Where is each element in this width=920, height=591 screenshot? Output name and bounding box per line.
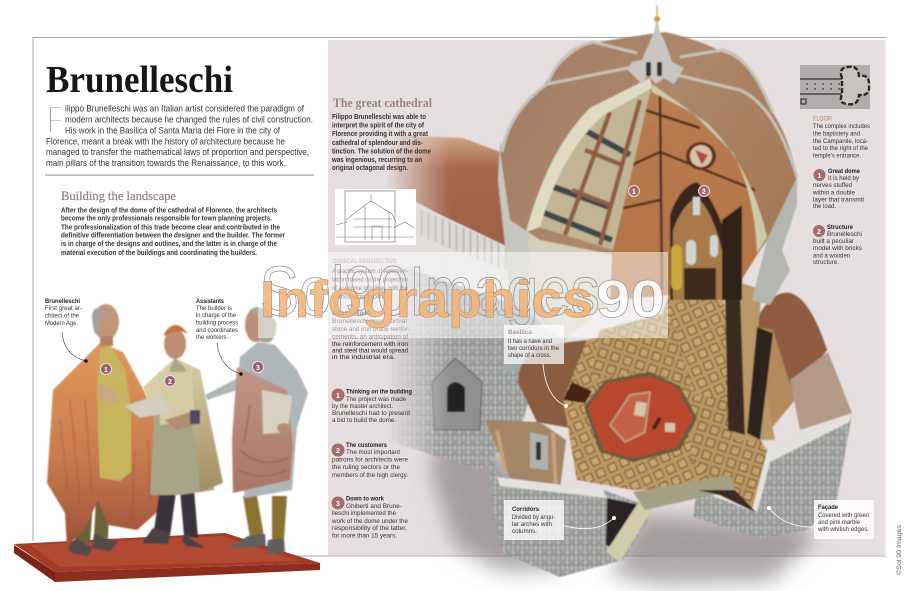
text: conical perspective and materials: tation based on the projection — [332, 276, 408, 284]
text: floor: the Campanile, loca- — [813, 138, 868, 145]
intro text block: His work in the Basilica of Santa Maria dei Fiore in the city of — [65, 125, 280, 136]
label: assistants: Assistants — [196, 298, 224, 305]
callout: corridors: Corridors — [512, 506, 539, 513]
section: building the landscape: After the design of the dome of the cathedral of Florence, the architects — [61, 205, 277, 214]
item 1: thinking on the building: The project was made — [346, 396, 406, 403]
text: great dome: It is held by — [828, 175, 860, 182]
intro text block: modern architects because he changed the rules of civil construction. — [65, 115, 313, 126]
intro text block: Florence, meant a break with the history of architecture because he — [46, 136, 285, 147]
text: floor: FLOOR — [813, 116, 832, 122]
building shadow — [430, 420, 815, 585]
section: the great cathedral: Florence providing it with a great — [332, 129, 429, 138]
cream cut-edge arches — [526, 78, 652, 232]
label: assistants: in charge of the — [196, 312, 236, 319]
text: conical perspective and materials: and steel that would spread — [332, 348, 408, 354]
badge 1 on figure: 1 — [104, 367, 108, 374]
section: the great cathedral: interpret the spirit of the city of — [332, 120, 425, 130]
text: great dome: the load. — [813, 203, 836, 210]
text: floor: The complex includes — [813, 123, 871, 130]
text: structure: Structure — [827, 224, 853, 231]
callout: corridors: Divided by angu- — [512, 514, 555, 521]
text: structure: built a peculiar — [813, 238, 855, 245]
intro text block — [46, 99, 313, 169]
callout: facade: and pink marble — [818, 519, 860, 526]
illustration: platform — [14, 533, 320, 582]
item 2: the customers: The customers — [346, 442, 387, 449]
item 3: down to work: responsibility of the latter, — [332, 525, 407, 532]
callout: basilica: two corridors in the — [508, 345, 559, 352]
item 3: down to work — [331, 496, 408, 540]
watermark: 90 — [596, 270, 665, 329]
text: great dome: 1 — [818, 173, 822, 180]
text: conical perspective and materials: vanishing points. — [332, 294, 392, 300]
text: floor: temple's entrance. — [813, 152, 861, 160]
floor plan image — [800, 65, 870, 109]
text: structure — [813, 224, 863, 266]
illustration: Brunelleschi figure — [47, 304, 163, 556]
round window — [686, 142, 716, 170]
item 3: down to work: Ghiberti and Brune- — [346, 503, 402, 510]
section: the great cathedral: was ingenious, recurring to an — [331, 155, 422, 164]
text: conical perspective and materials: the reinforcement with iron — [332, 341, 408, 348]
item 2: the customers: The most important — [346, 449, 400, 456]
text: conical perspective and materials: cements, an anticipation of — [332, 334, 408, 340]
dome base drum right — [752, 177, 797, 305]
badge 3 on figure: 3 — [256, 365, 260, 372]
section: the great cathedral: original octagonal design. — [332, 163, 408, 172]
text: conical perspective and materials: of a volume into lines with the — [332, 285, 408, 292]
red octagon floor — [584, 372, 697, 462]
intro text block: ilippo Brunelleschi was an Italian artist considered the paradigm of — [65, 104, 304, 115]
text: conical perspective and materials — [332, 258, 410, 361]
item 2: the customers: members of the high clergy. — [332, 472, 408, 479]
right chapel dome — [757, 293, 827, 395]
main floor — [563, 280, 767, 510]
lantern — [628, 17, 684, 84]
left chapel semi-dome — [518, 340, 587, 428]
section: building the landscape: The professionalization of this trade become clear and contributed in the — [61, 222, 280, 231]
item 3: down to work: Down to work — [346, 496, 384, 502]
perspective sketch — [335, 189, 416, 245]
item 2: the customers: the ruling sectors or the — [332, 464, 400, 471]
text: structure: and a wooden — [813, 252, 850, 260]
label: Brunelleschi: chitect of the — [45, 312, 79, 320]
label: Brunelleschi: Brunelleschi — [45, 298, 80, 305]
label: assistants: The builder is — [196, 305, 233, 312]
callout: corridors: columns. — [512, 528, 537, 535]
intro text block: managed to transfer the mathematical laws of proportion and perspective, — [46, 147, 309, 158]
label: assistants — [196, 298, 243, 376]
section: building the landscape: is in charge of the designs and outlines, and the latter is in charge of the — [61, 239, 277, 248]
text: structure: Brunelleschi — [827, 231, 862, 238]
section: the great cathedral: The great cathedral — [333, 96, 432, 110]
item 3: down to work: lleschi implemented the — [332, 510, 396, 517]
section: the great cathedral — [331, 96, 432, 172]
text: floor: the baptistery and — [813, 130, 860, 138]
callout: facade: with whitish edges. — [817, 526, 869, 533]
text: great dome: nerves stuffed — [813, 182, 852, 189]
badge 2 on dome — [698, 186, 710, 196]
watermark: Infographics — [260, 271, 593, 329]
cathedral illustration — [385, 5, 852, 577]
text: conical perspective and materials: stone and iron brace reinfor- — [332, 326, 410, 333]
text: great dome: layer that transmit — [813, 196, 864, 204]
item 1: thinking on the building — [332, 388, 412, 424]
text: structure: model with bricks — [813, 245, 863, 252]
label: assistants: the workers. — [196, 334, 228, 341]
text: conical perspective and materials: CONICAL PERSPECTIVE — [333, 258, 397, 265]
title: Brunelleschi — [46, 59, 233, 101]
item 2: the customers — [332, 442, 408, 479]
exposed brick structure — [538, 88, 651, 250]
text: conical perspective and materials: Materials — [332, 310, 372, 317]
section: building the landscape: definitive differentiation between the designer and the builder. The former — [61, 231, 285, 240]
text: great dome: within a double — [812, 190, 855, 196]
item 2: the customers: patrons for architects were — [332, 456, 408, 464]
illustration: assistant figure — [125, 325, 223, 548]
callout: basilica — [504, 325, 568, 408]
section: building the landscape: become the only professionals responsible for town planning projects. — [61, 214, 272, 223]
callout: corridors — [504, 500, 616, 540]
text: great dome: Great dome — [828, 168, 860, 175]
item 1: thinking on the building: 1 — [336, 393, 340, 400]
credit: ©Sol 90 Images — [896, 525, 903, 575]
interior walls — [610, 88, 757, 300]
text: structure: 2 — [817, 229, 821, 236]
item 1: thinking on the building: by the master architect. — [332, 403, 393, 410]
label: Brunelleschi: First great ar- — [45, 305, 82, 312]
section: building the landscape: Building the landscape — [61, 189, 176, 203]
badge 2 on figure: 2 — [168, 379, 172, 386]
item 2: the customers: 2 — [336, 448, 340, 455]
item 1: thinking on the building: a bid to build the dome. — [332, 417, 396, 424]
section: building the landscape: material execution of the buildings and coordinating the builders. — [61, 248, 257, 257]
watermark: Sol90Images — [260, 252, 600, 330]
badge 1 on dome: 1 — [632, 189, 636, 196]
text: floor — [813, 116, 871, 160]
badge 2 on dome: 2 — [702, 189, 706, 196]
item 1: thinking on the building: Brunelleschi had to present — [332, 410, 410, 417]
callout: basilica: Basilica — [508, 329, 532, 336]
far nave arch — [670, 182, 735, 300]
label: assistants: and coordinates — [196, 327, 239, 334]
text: floor: ted to the right of the — [813, 145, 868, 152]
intro text block: main pillars of the transition towards the Renaissance, to this work. — [46, 158, 286, 169]
item 3: down to work: 3 — [336, 501, 340, 508]
callout: corridors: lar arches with — [512, 521, 552, 528]
text: structure: structure. — [813, 259, 839, 266]
section: the great cathedral: cathedral of splendour and dis- — [332, 138, 424, 147]
callout: facade — [767, 500, 874, 539]
chapels front walls — [693, 413, 852, 538]
text: conical perspective and materials: in the industrial era. — [332, 354, 395, 361]
callout: facade: Covered with green — [818, 512, 869, 519]
illustration: builder figure — [205, 307, 308, 554]
item 1: thinking on the building: Thinking on the building — [346, 388, 412, 396]
badge 3 on figure — [252, 362, 264, 372]
section: the great cathedral: tinction. The solution of the dome — [332, 146, 431, 156]
callout: facade: Façade — [818, 504, 838, 511]
section: building the landscape — [61, 189, 285, 257]
text: great dome — [812, 168, 864, 210]
label: Brunelleschi — [45, 298, 88, 363]
dome tiled shell — [500, 32, 797, 280]
dome drum left — [498, 140, 565, 340]
badge 2 on figure — [164, 376, 176, 386]
callout: basilica: It has a nave and — [508, 338, 552, 345]
text: conical perspective and materials: A graphic system of represen- — [332, 268, 408, 275]
callout: basilica: shape of a cross. — [508, 352, 551, 359]
label: assistants: building process — [196, 320, 239, 326]
label: Brunelleschi: Modern Age. — [45, 320, 78, 327]
nave fading into the page — [385, 135, 565, 470]
text: conical perspective and materials: Brunelleschi used normal — [332, 318, 408, 325]
badge 1 on dome — [628, 186, 640, 196]
badge 1 on figure — [100, 364, 112, 374]
item 3: down to work: for more than 15 years. — [332, 532, 397, 540]
intro text block: F — [47, 99, 63, 142]
section: the great cathedral: Filippo Brunelleschi was able to — [332, 112, 427, 121]
dome ribs — [502, 42, 797, 177]
item 3: down to work: work of the dome under the — [331, 518, 408, 525]
